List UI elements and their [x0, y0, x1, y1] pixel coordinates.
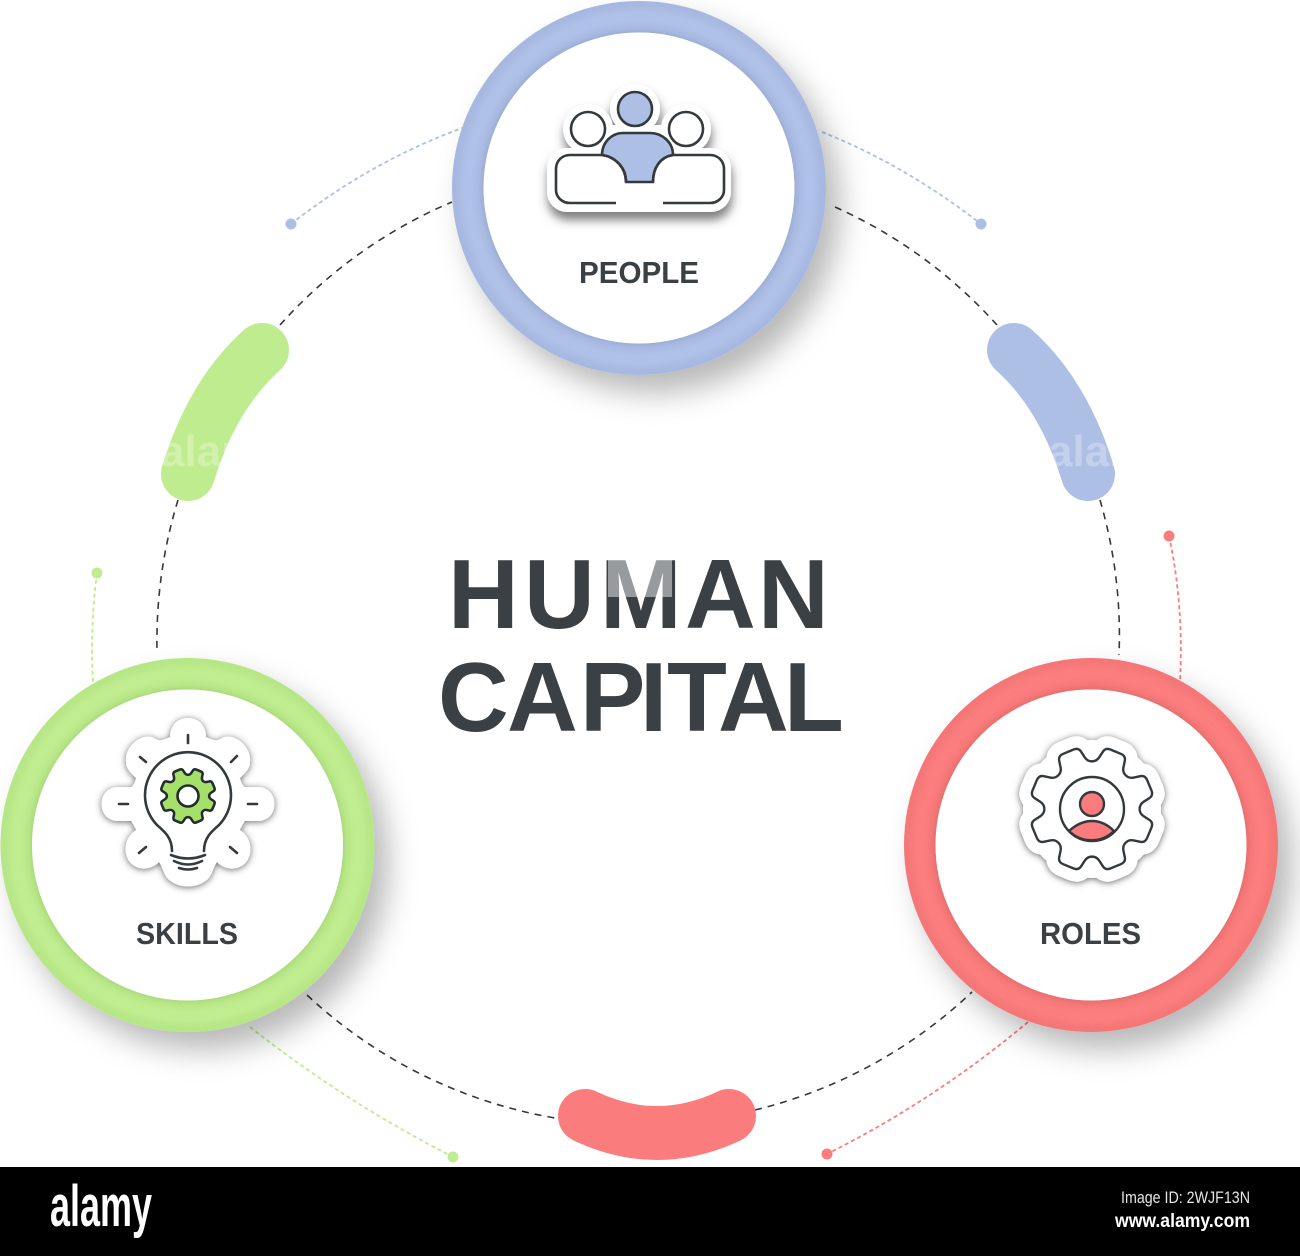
arc: blue: alan: [1048, 427, 1136, 476]
dotted connector: blue right: [822, 132, 986, 230]
ring: people: [452, 1, 826, 375]
title: HUMAN: [448, 539, 829, 649]
image id: Image ID: 2WJF13N: [1121, 1188, 1250, 1207]
icon: gear with person: [1023, 740, 1161, 878]
node: roles: [904, 658, 1278, 1032]
arc: green: alam: [160, 427, 260, 476]
label: skills: SKILLS: [136, 916, 238, 951]
disc: skills: [32, 690, 343, 1000]
arc: red: [585, 1116, 729, 1133]
arc: blue: [1014, 350, 1136, 476]
website: www.alamy.com: [1114, 1211, 1250, 1232]
disc: roles: [936, 690, 1246, 1000]
icon: people: [547, 84, 731, 212]
dashed main circle: [157, 202, 1119, 1118]
dotted connector: red top: [1164, 530, 1181, 682]
ring: roles: [904, 658, 1278, 1032]
footer bar: [0, 1167, 1300, 1256]
arc: green: [160, 350, 262, 476]
node: people: [452, 1, 826, 375]
dotted connector: green top: [92, 568, 102, 684]
disc: people: [484, 32, 794, 344]
title: [438, 539, 844, 752]
dotted connector: blue left: [286, 128, 462, 230]
label: roles: ROLES: [1040, 916, 1141, 951]
footer logo: alamy: [50, 1174, 152, 1239]
icon: lightbulb with gear: [102, 718, 274, 886]
dotted connector: green bottom: [250, 1027, 458, 1162]
ring: skills: [0, 658, 374, 1032]
title: CAPITAL: [438, 642, 844, 752]
node: skills: [0, 658, 374, 1032]
dotted connector: red bottom: [822, 1022, 1028, 1160]
label: people: PEOPLE: [579, 255, 699, 290]
